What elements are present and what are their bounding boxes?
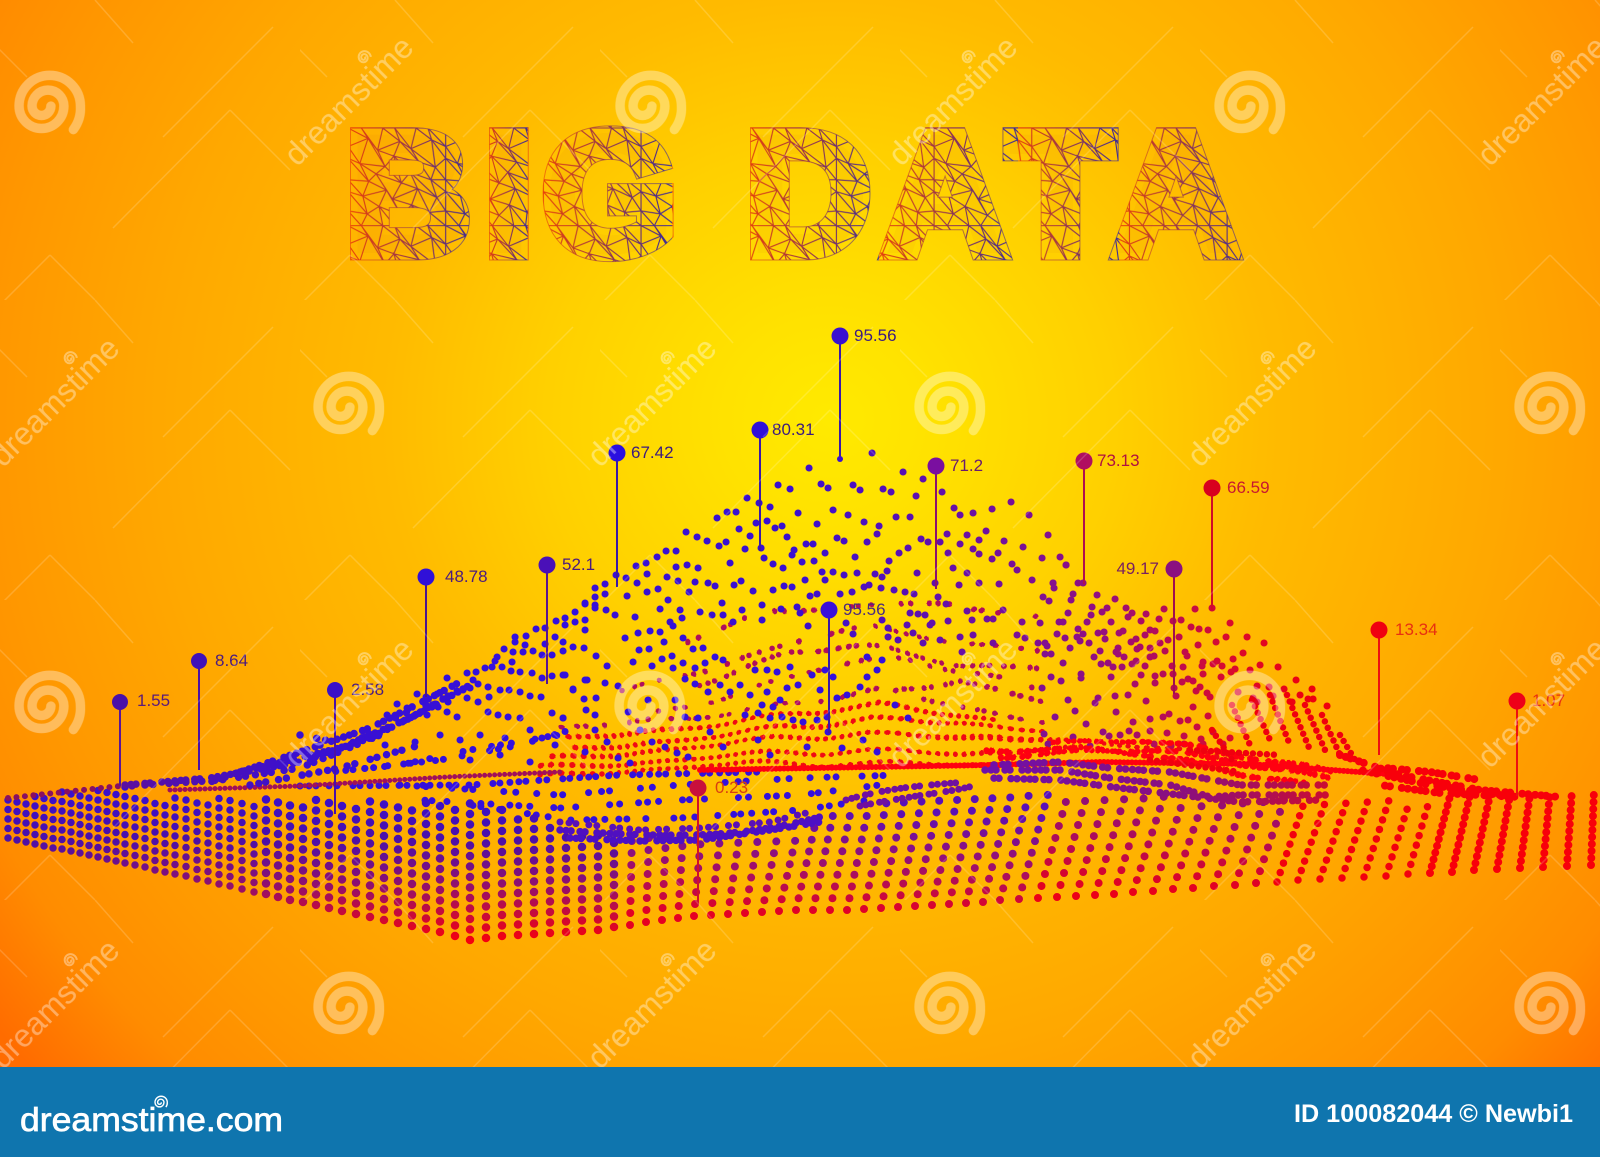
pin 48.78 — [418, 567, 488, 697]
watermark layer: lines, spirals and text: dreamstime — [881, 29, 1024, 172]
pin 1.55: 1.55 — [137, 691, 170, 710]
pin 2.58: 2.58 — [351, 680, 384, 699]
crimson scatter of the hill centre — [560, 600, 1040, 728]
pin 49.17: 49.17 — [1116, 559, 1159, 578]
pin 66.59 — [1204, 478, 1270, 610]
pin 48.78: 48.78 — [445, 567, 488, 586]
watermark layer: lines, spirals and text: dreamstime — [881, 631, 1024, 774]
pin 1.07: 1.07 — [1532, 691, 1565, 710]
pin 52.1 — [538, 555, 595, 684]
hill top scatter dots — [585, 453, 1066, 652]
hill right side scatter dots — [1042, 565, 1327, 746]
dense right hill stripes — [1150, 695, 1358, 772]
back rows of small red dots — [540, 704, 1300, 773]
pin 71.2 — [928, 456, 983, 589]
title: BIG DATA low-poly wire lettering: BIG DATA — [346, 98, 1238, 290]
pin 0.23 — [690, 778, 748, 905]
pin 49.17 — [1116, 559, 1182, 694]
pin 1.07 — [1508, 691, 1565, 796]
pin 0.23: 0.23 — [715, 778, 748, 797]
hill left flank blue dots — [385, 604, 595, 762]
pin 80.31 — [752, 420, 815, 551]
pin 95.56 top: 95.56 — [854, 326, 897, 345]
dot surface chart — [8, 453, 1594, 940]
front dense blue ridge — [560, 783, 975, 841]
pin 8.64 — [191, 651, 248, 770]
pin 67.42: 67.42 — [631, 443, 674, 462]
pin 95.56 top — [832, 326, 897, 462]
watermark layer: lines, spirals and text: dreamstime — [1180, 932, 1323, 1075]
pin 2.58 — [327, 680, 384, 814]
watermark layer: lines, spirals and text: dreamstime — [277, 29, 420, 172]
pin 95.56 middle — [820, 600, 886, 733]
pin 71.2: 71.2 — [950, 456, 983, 475]
lower sheet, far right red columns — [1277, 798, 1430, 882]
hill middle blue dots — [563, 626, 908, 763]
bright red band — [700, 762, 1400, 775]
watermark layer: lines, spirals and text: dreamstime — [580, 932, 723, 1075]
watermark layer: lines, spirals and text: dreamstime — [580, 330, 723, 473]
footer banner — [0, 1067, 1600, 1157]
pin 52.1: 52.1 — [562, 555, 595, 574]
pin 67.42 — [608, 443, 674, 587]
lower sheet, middle part — [630, 787, 1050, 925]
footer image id and credit: ID 100082044 © Newbi1 — [1294, 1100, 1573, 1128]
lower sheet, left part — [8, 785, 254, 892]
data pins with value labels — [112, 326, 1565, 905]
pin 13.34 — [1370, 620, 1438, 755]
dense left ridge — [125, 682, 470, 786]
pin 66.59: 66.59 — [1227, 478, 1270, 497]
pin 13.34: 13.34 — [1395, 620, 1438, 639]
pin 95.56 middle: 95.56 — [843, 600, 886, 619]
lower sheet, right part — [1038, 791, 1284, 898]
watermark layer: lines, spirals and text: dreamstime — [277, 631, 420, 774]
pin 73.13: 73.13 — [1097, 451, 1140, 470]
watermark layer: lines, spirals and text: dreamstime — [1180, 330, 1323, 473]
pin 8.64: 8.64 — [215, 651, 248, 670]
purple back ridge at right — [985, 762, 1330, 802]
dense right foot band — [1340, 755, 1560, 797]
footer logo text: dreamstime.com — [20, 1101, 283, 1138]
dark top rows at left — [8, 786, 120, 798]
pin 73.13 — [1076, 451, 1140, 584]
pin 80.31: 80.31 — [772, 420, 815, 439]
pin 1.55 — [112, 691, 170, 786]
blue scatter below the red band — [300, 730, 900, 820]
